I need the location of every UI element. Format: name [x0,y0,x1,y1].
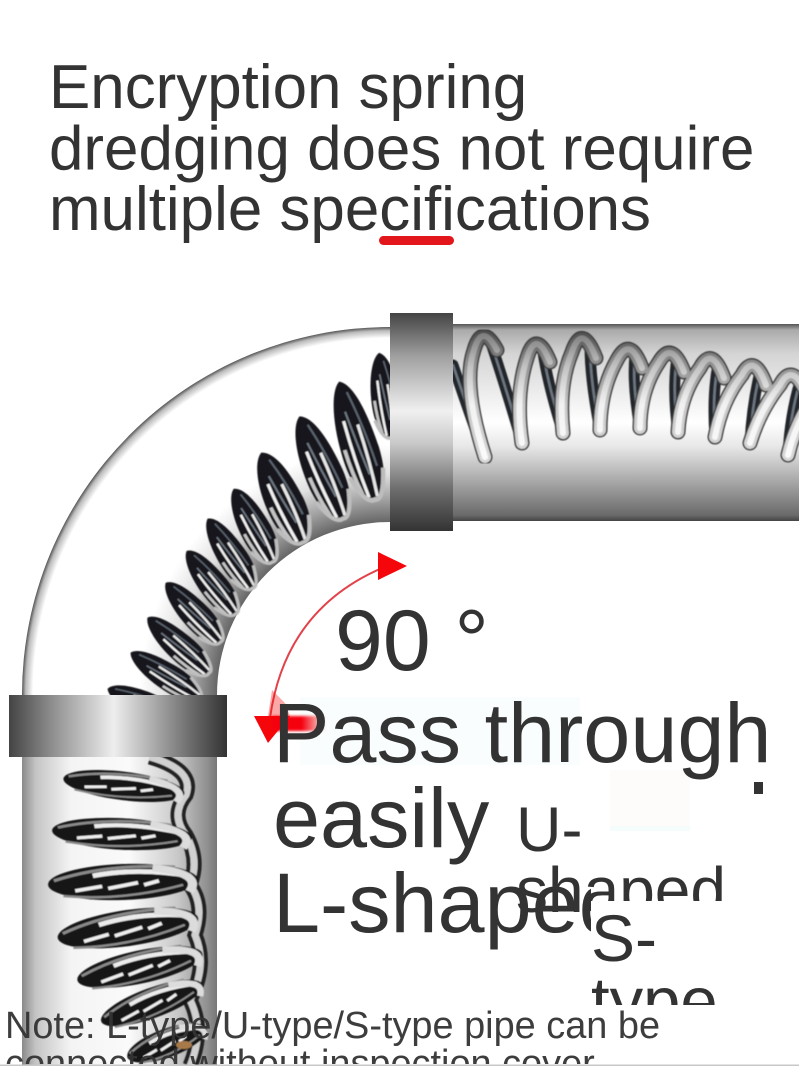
title: multiple specifications [49,175,651,244]
clipped U-shaped label [516,795,726,926]
title red underline [379,236,454,245]
90 degree arrow [254,552,407,743]
note text: Note: L-type/U-type/S-type pipe can be [5,1005,660,1047]
clipped mark [754,782,763,794]
pipe illustration [9,313,799,1066]
spring in elbow [106,352,390,695]
faint background blocks [300,697,690,831]
vertical pipe [22,757,217,1066]
top collar [390,313,453,531]
angle label: 90 ° [335,593,489,689]
title: dredging does not require [49,114,754,184]
spring in vertical pipe [47,757,211,1066]
title: Encryption spring [49,53,527,122]
horizontal pipe [453,324,799,521]
curved pipe elbow [22,327,390,695]
clipped U-shaped label: U- [516,795,582,865]
main caption: easily [273,770,490,865]
clipped S-type label: type [591,964,718,1039]
spring in horizontal pipe [453,336,799,457]
main caption: Pass through [273,685,771,780]
note text [6,1010,658,1064]
clipped U-shaped label: shaped [516,854,726,926]
clipped S-type label: S- [591,901,657,975]
bottom edge line [0,1064,799,1066]
main caption [273,685,771,950]
main caption: L-shaped [273,855,626,950]
left collar [9,695,227,757]
title [49,53,754,244]
clipped S-type label [591,901,722,1005]
